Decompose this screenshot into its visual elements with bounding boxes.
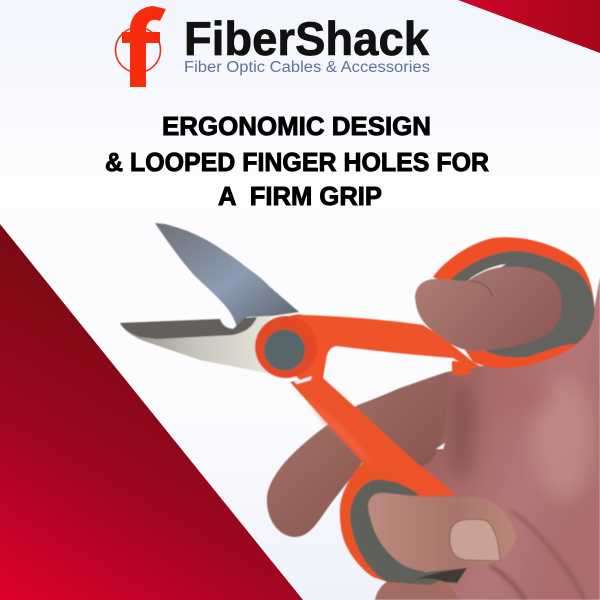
logo wordmark: FiberShack: [184, 12, 430, 65]
lower handle highlight: [305, 395, 378, 468]
headline line 3: A FIRM GRIP: [218, 181, 382, 211]
logo icon: red f in ring: [116, 6, 166, 87]
hand: palm: [360, 277, 600, 600]
upper ring opening: [467, 264, 506, 281]
upper handle: [265, 314, 480, 380]
blade: lower dark edge: [120, 317, 257, 339]
pivot orange housing: [255, 316, 317, 378]
upper ring outer: [433, 237, 594, 368]
photo: hand holding scissors: [120, 223, 600, 600]
pivot screw: [264, 330, 305, 370]
lower ring grey grip: [350, 480, 467, 585]
red corner: bottom left: [0, 224, 303, 600]
thumbnail: [450, 519, 500, 561]
hand: middle finger: [267, 372, 448, 537]
lower ring dark base: [405, 568, 467, 584]
headline line 1: ERGONOMIC DESIGN: [162, 111, 431, 141]
fingernail crease: [470, 281, 492, 296]
white gap between fingers: [436, 443, 445, 449]
lower handle: [290, 378, 457, 497]
logo: FiberShack: [116, 6, 430, 87]
upper finger: [415, 267, 562, 351]
hand: palm shading: [450, 379, 595, 600]
thumb: [368, 493, 516, 572]
lower ring outer: [340, 463, 420, 584]
pivot gap: [294, 376, 312, 384]
blade: upper: [155, 223, 299, 327]
upper ring grey grip: [450, 251, 594, 358]
headline line 2: & LOOPED FINGER HOLES FOR: [105, 147, 489, 177]
hand: bottom finger: [375, 575, 458, 600]
logo tagline: Fiber Optic Cables & Accessories: [184, 59, 430, 76]
blade: lower silver: [120, 316, 272, 373]
finger rest stub: [452, 361, 471, 375]
headline: [105, 111, 489, 211]
red corner: top right: [458, 0, 600, 53]
